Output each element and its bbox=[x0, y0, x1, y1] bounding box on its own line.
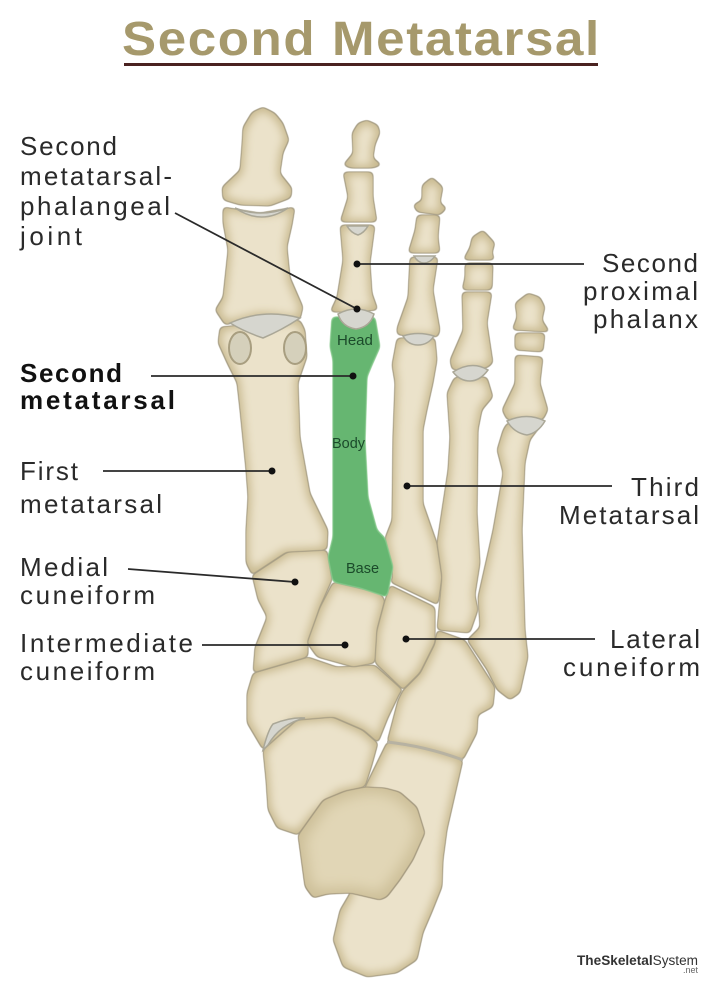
big toe distal phalanx bbox=[222, 107, 292, 206]
sesamoid: left bbox=[229, 332, 251, 364]
highlighted second metatarsal bbox=[328, 317, 393, 597]
fourth toe distal phalanx bbox=[463, 230, 495, 260]
third toe proximal phalanx bbox=[397, 257, 440, 337]
cartilage: third toe middle joint bbox=[414, 256, 435, 263]
talus head bbox=[298, 787, 425, 900]
text block: Metatarsal bbox=[559, 500, 699, 530]
text block: metatarsal bbox=[20, 385, 175, 415]
cartilage: big toe joint bbox=[230, 314, 300, 338]
text block: Medial bbox=[20, 552, 108, 582]
leader line bbox=[407, 485, 612, 487]
leader line bbox=[406, 638, 595, 640]
dot bbox=[268, 468, 276, 474]
fourth metatarsal bbox=[437, 377, 493, 633]
leader line bbox=[128, 569, 295, 582]
callout: medial cuneiform bbox=[20, 552, 298, 610]
cartilage: fifth toe joint bbox=[507, 416, 545, 435]
callout: intermediate cuneiform bbox=[20, 628, 348, 686]
talus bbox=[263, 717, 378, 835]
cuboid bbox=[387, 630, 495, 760]
callout: first metatarsal bbox=[20, 456, 276, 519]
leader line bbox=[202, 644, 345, 646]
text block: proximal bbox=[583, 276, 698, 306]
callout: second metatarsal-phalangeal joint bbox=[19, 131, 360, 312]
fourth toe proximal phalanx bbox=[450, 292, 493, 370]
dot bbox=[350, 372, 356, 380]
second toe distal phalanx bbox=[343, 120, 382, 168]
cartilage: big toe interphalangeal bbox=[235, 208, 288, 217]
text block: joint bbox=[19, 221, 83, 251]
text block: cuneiform bbox=[20, 656, 155, 686]
callout: lateral cuneiform bbox=[402, 624, 709, 682]
logo: .net bbox=[683, 965, 699, 975]
cartilage: second toe middle joint bbox=[347, 226, 368, 235]
dot bbox=[342, 642, 348, 648]
second toe middle phalanx bbox=[340, 172, 377, 222]
text block: phalanx bbox=[593, 304, 698, 334]
first metatarsal bbox=[218, 320, 328, 575]
leader line bbox=[175, 213, 357, 309]
text block: Third bbox=[631, 472, 699, 502]
leader line bbox=[103, 470, 272, 472]
dot bbox=[354, 306, 360, 312]
calcaneus bbox=[333, 742, 463, 977]
text block: cuneiform bbox=[20, 580, 155, 610]
cartilage: second toe base joint bbox=[338, 309, 374, 329]
callout: third metatarsal bbox=[404, 472, 708, 530]
cartilage: fourth toe joint bbox=[453, 365, 488, 381]
text block: Lateral bbox=[610, 624, 700, 654]
leader line bbox=[357, 263, 584, 265]
cartilage: calcaneocuboid joint bbox=[387, 742, 463, 760]
text block: First bbox=[20, 456, 79, 486]
dot bbox=[402, 636, 410, 642]
third metatarsal bbox=[385, 338, 442, 605]
cartilage: third toe joint bbox=[403, 334, 434, 345]
bone part labels bbox=[332, 332, 379, 577]
dot bbox=[292, 578, 298, 586]
medial cuneiform bbox=[252, 550, 332, 673]
text block: metatarsal- bbox=[20, 161, 172, 191]
foot skeleton illustration bbox=[215, 107, 550, 977]
text block: Second bbox=[602, 248, 698, 278]
fifth toe distal phalanx bbox=[512, 293, 550, 332]
big toe proximal phalanx bbox=[215, 207, 303, 325]
joint cartilage bbox=[229, 208, 545, 760]
leader line bbox=[151, 375, 353, 377]
text block: metatarsal bbox=[20, 489, 162, 519]
navicular bbox=[247, 657, 403, 750]
title: Second Metatarsal bbox=[122, 11, 601, 66]
third toe distal phalanx bbox=[413, 177, 447, 215]
label: Base: Base bbox=[346, 561, 379, 577]
fourth toe middle phalanx bbox=[462, 263, 493, 290]
text block: Second bbox=[20, 358, 122, 388]
cartilage: talonavicular joint bbox=[263, 718, 305, 750]
lateral cuneiform bbox=[375, 585, 435, 690]
callout: second metatarsal bbox=[20, 358, 356, 415]
intermediate cuneiform bbox=[307, 582, 385, 667]
text block: Second bbox=[20, 131, 117, 161]
dot bbox=[354, 260, 360, 268]
logo: TheSkeletalSystem bbox=[577, 953, 698, 968]
callout: second proximal phalanx bbox=[354, 248, 708, 334]
text block: phalangeal bbox=[20, 191, 170, 221]
logo bbox=[577, 953, 699, 975]
text block: Intermediate bbox=[20, 628, 193, 658]
fifth toe middle phalanx bbox=[515, 333, 545, 352]
label: Body: Body bbox=[332, 436, 366, 452]
second toe proximal phalanx bbox=[330, 225, 378, 312]
sesamoid: right bbox=[284, 332, 306, 364]
label: Head: Head bbox=[337, 332, 373, 349]
third toe middle phalanx bbox=[408, 215, 440, 253]
fifth toe proximal phalanx bbox=[502, 355, 548, 420]
dot bbox=[404, 482, 410, 490]
text block: cuneiform bbox=[563, 652, 700, 682]
fifth metatarsal bbox=[467, 423, 543, 700]
